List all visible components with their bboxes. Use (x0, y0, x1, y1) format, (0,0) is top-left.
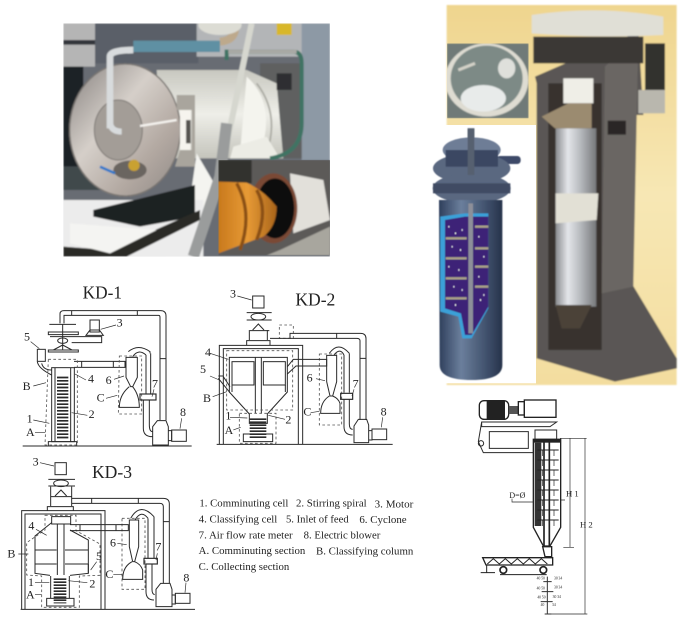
numbered labels: 7 (353, 376, 359, 390)
legend line 3: 8. Electric blower (304, 530, 381, 542)
mill column (37, 324, 102, 446)
lower shaft detail: 34 (552, 603, 556, 607)
comminuting spiral (41, 578, 79, 603)
numbered labels: 6 (307, 370, 313, 384)
heading: KD-2: KD-2 (295, 289, 335, 309)
numbered labels: 3 (230, 286, 236, 300)
legend line 4 (199, 545, 414, 558)
motor and gearbox (479, 400, 556, 419)
inset photo: orange rotor (218, 160, 330, 255)
cyclone (123, 510, 154, 579)
heading: KD-3: KD-3 (92, 462, 132, 482)
pipework (270, 333, 366, 420)
legend line 1 (199, 498, 414, 510)
comminuting base (243, 434, 273, 442)
diagram: vertical mill with dimensions (478, 400, 593, 614)
legend line 4: B. Classifying column (316, 546, 414, 558)
leader arrows (18, 463, 186, 595)
labels at left of KD-2: B (203, 391, 211, 405)
support frame (478, 422, 557, 453)
lower shaft detail: 40 50 (537, 576, 545, 580)
diagram: KD-1 (23, 282, 192, 446)
flow meter 7 (140, 394, 156, 400)
legend line 5: C. Collecting section (199, 561, 290, 573)
numbered labels: 3 (117, 316, 123, 330)
cyclone (321, 347, 349, 413)
lower shaft detail: 30 34 (553, 595, 561, 599)
numbered labels: 2 (89, 576, 95, 590)
inset photo: mill interior (445, 43, 529, 118)
numbered labels: A (26, 425, 35, 439)
heading: KD-1: KD-1 (83, 282, 122, 302)
pipework (70, 498, 169, 583)
classifying cell (35, 517, 88, 575)
ground and pipework (23, 311, 192, 446)
dimension labels (509, 488, 593, 529)
comminuting base (47, 576, 74, 606)
dashed section outlines (227, 325, 342, 443)
motor (86, 320, 103, 335)
legend line 2: 5. Inlet of feed (286, 514, 349, 526)
numbered labels: 7 (155, 540, 161, 554)
numbered labels: C (303, 405, 311, 419)
legend line 2: 6. Cyclone (359, 514, 407, 526)
numbered labels: 6 (106, 373, 112, 387)
legend line 1: 3. Motor (375, 498, 414, 510)
dimension labels: H 2 (580, 519, 593, 529)
lower shaft detail: 40 (541, 603, 544, 607)
leader arrows (31, 325, 182, 432)
comminuting spiral (233, 418, 283, 438)
drive and motor (247, 296, 272, 340)
cutaway illustration panel (425, 125, 536, 383)
numbered labels: 5 (96, 549, 102, 563)
machine column (535, 32, 677, 382)
legend line 4: A. Comminuting section (199, 545, 306, 557)
numbered labels: 1 (27, 412, 33, 426)
numbered labels: C (97, 391, 105, 405)
numbered labels (7, 454, 189, 602)
numbered labels (225, 286, 387, 437)
labels at left of KD-2 (200, 345, 211, 405)
screw conveyor (481, 558, 553, 575)
numbered labels: B (7, 546, 15, 560)
diameter leader (512, 499, 534, 502)
lower shaft detail (537, 576, 562, 614)
numbered labels: 1 (225, 408, 231, 422)
numbered labels: 1 (28, 575, 34, 589)
labels at left of KD-2: 4 (205, 345, 211, 359)
leader arrows (210, 296, 383, 430)
stirring spiral (46, 377, 80, 438)
numbered labels: 8 (381, 404, 387, 418)
flow meter 7 (341, 393, 353, 399)
diagram: KD-2 (210, 286, 393, 444)
diagram: KD-3 (7, 454, 195, 609)
photo: horizontal bead mill (63, 15, 330, 257)
dashed section outlines (45, 356, 142, 445)
numbered labels (23, 316, 186, 439)
classifying hopper (218, 357, 287, 423)
lower shaft detail: 30 34 (554, 576, 562, 580)
numbered labels: 2 (285, 413, 291, 427)
numbered labels: 3 (33, 454, 39, 468)
numbered labels: 8 (183, 570, 189, 584)
numbered labels: 4 (88, 372, 94, 386)
numbered labels: 4 (28, 518, 34, 532)
numbered labels: A (225, 423, 234, 437)
legend line 3: 7. Air flow rate meter (199, 529, 293, 541)
numbered labels: A (26, 588, 35, 602)
flow meter 7 (144, 558, 157, 564)
numbered labels: 7 (152, 376, 158, 390)
cyclone (119, 347, 151, 407)
return pipe and blower (143, 400, 186, 445)
numbered labels: 2 (89, 407, 95, 421)
legend (199, 498, 414, 573)
lower shaft detail: 40 50 (537, 586, 545, 590)
return pipe and blower (344, 399, 387, 443)
drive and motor (48, 463, 75, 506)
legend line 3 (199, 529, 381, 542)
photo: vertical mill on cream background (425, 5, 677, 385)
legend line 1: 2. Stirring spiral (296, 498, 367, 510)
labels at left of KD-2: 5 (200, 362, 206, 376)
numbered labels: 6 (110, 536, 116, 550)
legend line 2 (199, 513, 407, 526)
dimension lines (548, 438, 587, 614)
dashed section outlines (27, 515, 145, 607)
numbered labels: C (105, 567, 113, 581)
numbered labels: 5 (24, 330, 30, 344)
cabinet frame and ground (21, 507, 195, 609)
lower shaft detail: 30 34 (554, 586, 562, 590)
lower shaft detail: 40 50 (537, 596, 546, 600)
dimension labels: D=Ø (509, 491, 526, 500)
dimension labels: H 1 (566, 488, 579, 498)
numbered labels: 8 (180, 405, 186, 419)
cabinet frame and ground (217, 341, 393, 444)
mill column (533, 439, 561, 557)
cutaway mill illustration (433, 128, 521, 380)
numbered labels: B (23, 379, 31, 393)
legend line 2: 4. Classifying cell (199, 513, 277, 525)
legend line 1: 1. Comminuting cell (199, 498, 288, 510)
return pipe and blower (146, 564, 190, 607)
